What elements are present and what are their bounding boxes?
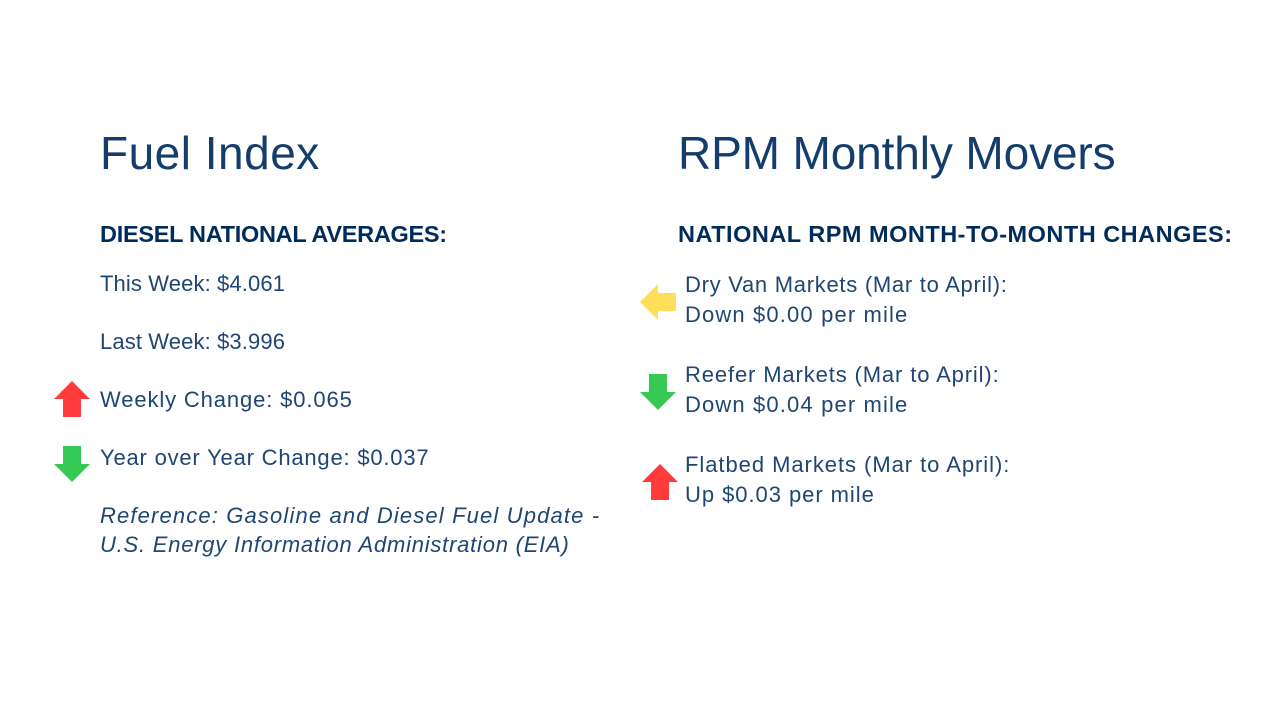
text: reference: Reference: Gasoline and Diesel Fuel Update - [100,503,600,528]
text: reference [100,503,600,557]
heading: Fuel Index: Fuel Index [100,127,320,179]
text: dry van markets [685,272,1008,327]
icon: red up arrow [642,464,678,500]
text: reefer markets [685,362,1000,417]
icon: green down arrow [640,374,676,410]
icon: yellow left arrow [640,284,676,320]
text: reefer markets: Down $0.04 per mile [685,392,908,417]
text: flatbed markets: Flatbed Markets (Mar to April): [685,452,1010,477]
text: dry van markets: Dry Van Markets (Mar to April): [685,272,1008,297]
subheading: national RPM changes: NATIONAL RPM MONTH-TO-MONTH CHANGES: [678,221,1233,247]
text: reefer markets: Reefer Markets (Mar to April): [685,362,1000,387]
text: this week: This Week: $4.061 [100,271,285,296]
subheading: diesel national averages: DIESEL NATIONAL AVERAGES: [100,221,447,247]
icon: red up arrow [54,381,90,417]
text: dry van markets: Down $0.00 per mile [685,302,908,327]
text: flatbed markets: Up $0.03 per mile [685,482,875,507]
text: flatbed markets [685,452,1010,507]
text: year over year change: Year over Year Change: $0.037 [100,445,429,470]
text: last week: Last Week: $3.996 [100,329,285,354]
text: reference: U.S. Energy Information Administration (EIA) [100,532,570,557]
text: weekly change: Weekly Change: $0.065 [100,387,353,412]
heading: RPM Monthly Movers: RPM Monthly Movers [678,127,1116,179]
icon: green down arrow [54,446,90,482]
